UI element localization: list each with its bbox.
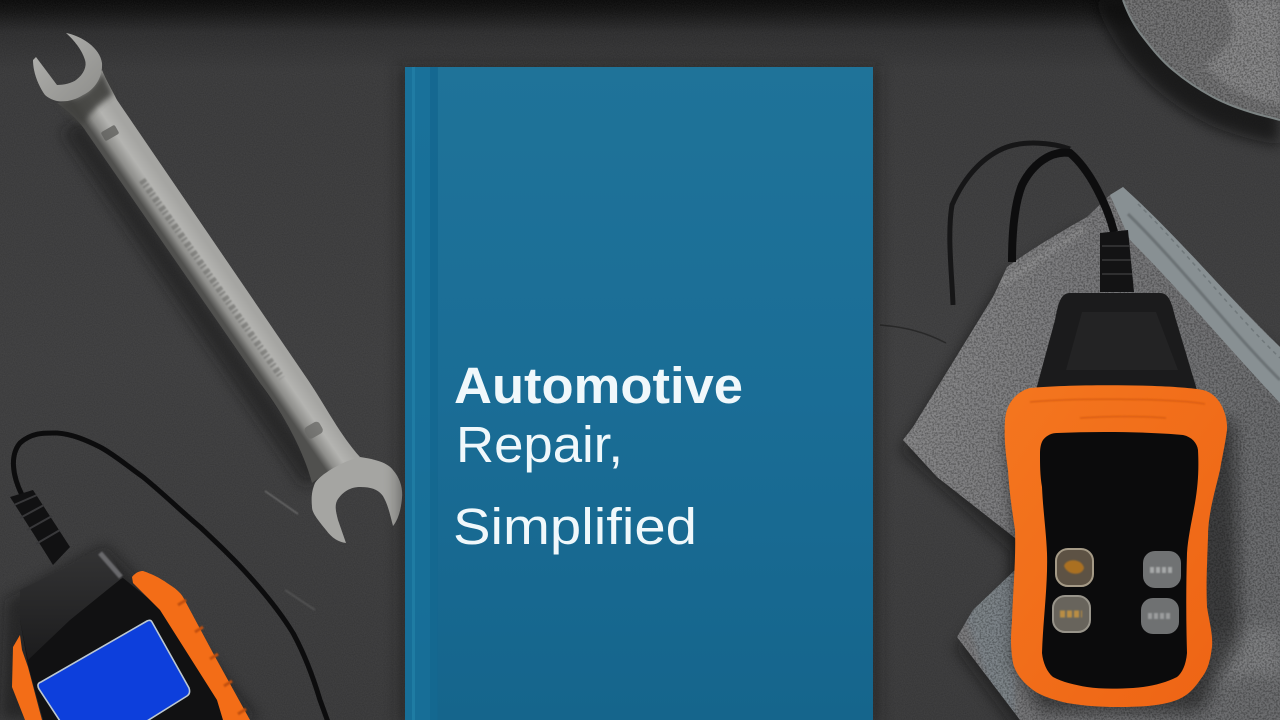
- scan tool on lower left: [0, 433, 328, 720]
- title: Simplified: [453, 498, 697, 555]
- thin rear cable: [950, 143, 1070, 305]
- grey cloth in top-right corner: [1120, 0, 1280, 125]
- scan tool on right: [950, 143, 1240, 712]
- orange left bumper: [12, 635, 42, 720]
- cable: [13, 433, 328, 720]
- black body: [20, 578, 223, 720]
- cable boot: [1100, 230, 1134, 292]
- grey top-right button: [1143, 551, 1181, 588]
- main cable: [1012, 153, 1114, 262]
- connector highlight: [100, 553, 121, 577]
- title: [453, 357, 743, 555]
- orange housing: [1005, 385, 1227, 707]
- icon: wrench: [33, 33, 402, 543]
- amber bottom-left button: [1053, 596, 1090, 632]
- black face: [1040, 432, 1198, 689]
- grey folded cloth on right: [900, 185, 1280, 720]
- device shadow: [1005, 420, 1240, 712]
- book cover: [398, 66, 880, 720]
- book body: [405, 67, 873, 720]
- cable boot: [10, 490, 70, 565]
- connector head: [1036, 293, 1197, 390]
- connector head: [20, 551, 122, 660]
- book spine groove: [405, 67, 437, 720]
- orange housing ridges: [1030, 399, 1205, 418]
- wrench shadow: [72, 125, 315, 480]
- title: Repair,: [456, 416, 623, 473]
- title: Automotive: [454, 357, 743, 414]
- book shadow: [398, 66, 880, 720]
- device shadow: [0, 545, 260, 720]
- amber top-left button: [1056, 549, 1093, 586]
- grey bottom-right button: [1141, 598, 1179, 634]
- orange right bumper: [132, 571, 250, 720]
- blue screen: [38, 620, 190, 720]
